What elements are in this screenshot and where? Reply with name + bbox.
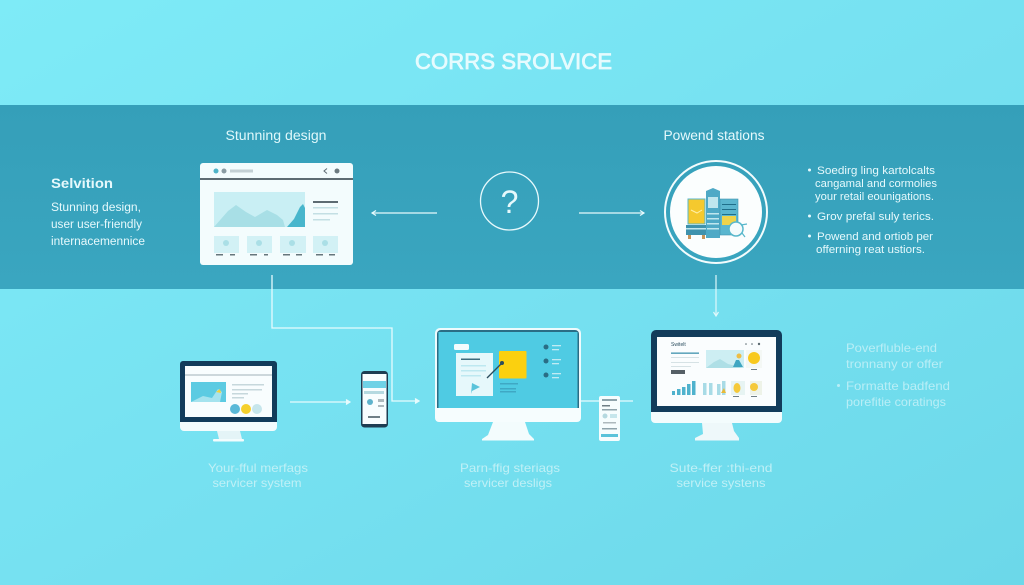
icon: buildings in circle <box>665 161 767 263</box>
caption: left monitor: Your-fful merfags <box>208 461 308 475</box>
panel: dark band <box>0 105 1024 289</box>
arrow: right <box>579 210 644 216</box>
arrow: circle to monitor <box>714 275 718 316</box>
text block: bullets right: your retail eounigations. <box>815 191 934 203</box>
text block: bullets right: Powend and ortiob per <box>817 231 933 243</box>
monitor: right: Switelt <box>671 342 686 348</box>
caption: left monitor: servicer system <box>212 476 302 490</box>
monitor: left <box>180 361 277 442</box>
text block: right lower: Poverfluble-end <box>846 341 937 355</box>
text block: right lower: Formatte badfend <box>846 379 950 393</box>
text block: right lower: tronnany or offer <box>846 357 943 371</box>
monitor: right <box>651 330 782 440</box>
text block: right lower: porefitie coratings <box>846 395 946 409</box>
caption: right monitor <box>670 461 772 490</box>
text block: bullets right: cangamal and cormolies <box>815 178 938 190</box>
connector: browser to monitor <box>272 275 419 404</box>
text block: solution: user user-friendly <box>51 219 142 231</box>
caption: right monitor: Sute-ffer :thi-end <box>670 461 772 475</box>
heading: stunning design: Stunning design <box>226 128 326 143</box>
heading: powered stations: Powend stations <box>664 128 765 143</box>
caption: center monitor: servicer desligs <box>464 476 552 490</box>
text block: bullets right: Grov prefal suly terics. <box>817 211 934 223</box>
text block: solution: internacemennice <box>51 236 145 248</box>
icon: question mark: ? <box>501 184 518 220</box>
text block: solution: Selvition <box>51 175 113 191</box>
icon: question mark <box>480 172 538 230</box>
caption: right monitor: service systens <box>676 476 766 490</box>
small phone <box>599 396 620 441</box>
phone <box>361 371 388 428</box>
text block: solution <box>51 175 145 248</box>
arrow: monitor to phone <box>290 400 350 404</box>
caption: center monitor: Parn-ffig steriags <box>460 461 560 475</box>
browser window mockup <box>200 163 353 265</box>
caption: center monitor <box>460 461 560 490</box>
text block: bullets right: Soedirg ling kartolcalts <box>817 165 936 177</box>
text block: bullets right <box>808 165 938 256</box>
arrow: left <box>372 210 437 216</box>
text block: solution: Stunning design, <box>51 202 141 214</box>
monitor: center <box>435 328 581 440</box>
text block: bullets right: offerning reat ustiors. <box>816 244 925 256</box>
title: CORRS SROLVICE <box>415 49 612 74</box>
connector: center monitor to small phone <box>581 400 633 402</box>
caption: left monitor <box>208 461 308 490</box>
text block: right lower <box>837 341 950 409</box>
